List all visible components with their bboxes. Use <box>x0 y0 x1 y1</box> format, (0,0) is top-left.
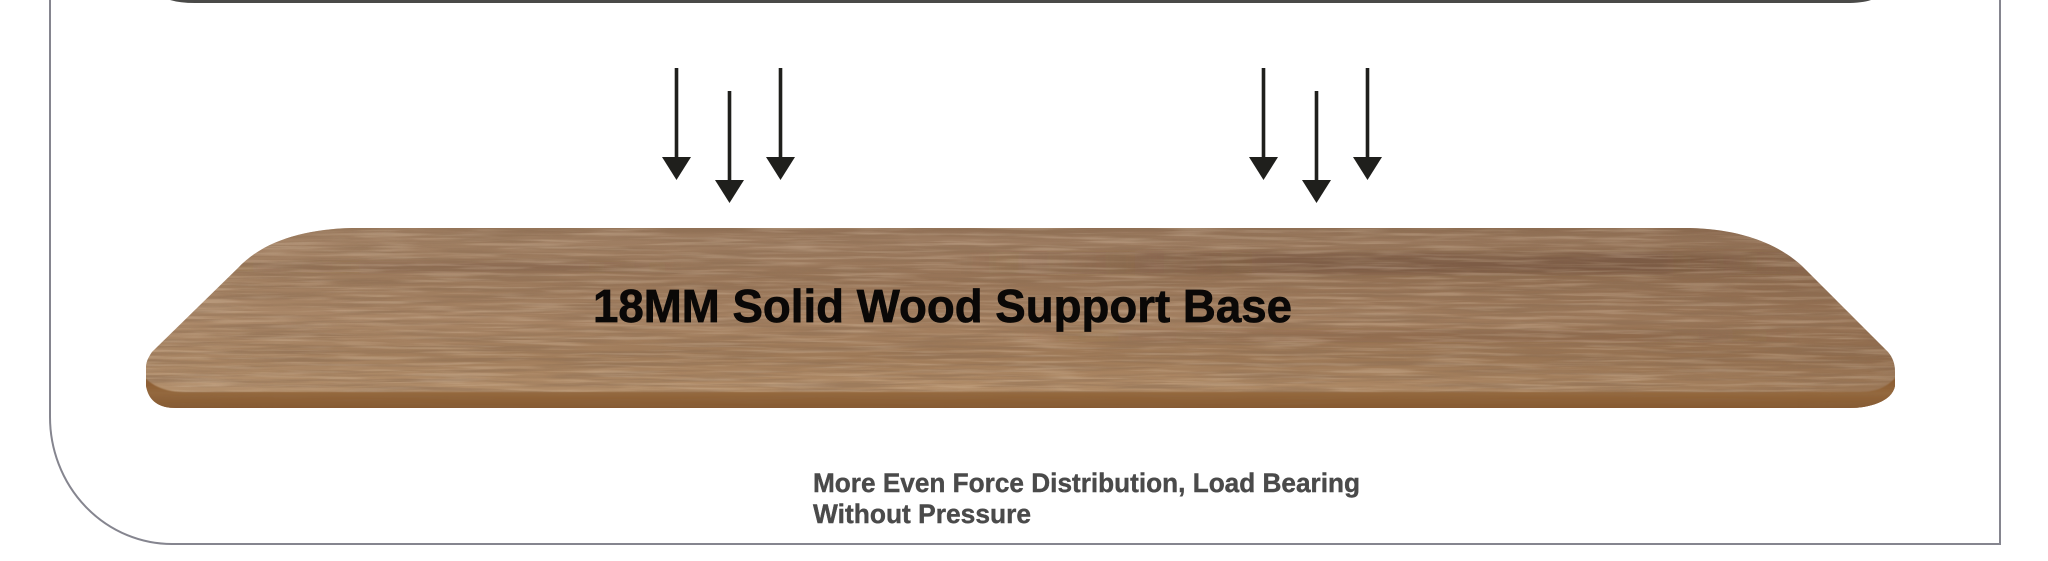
arrow <box>1353 68 1382 180</box>
board front edge <box>146 378 1895 408</box>
arrow <box>715 91 744 203</box>
caption: Without Pressure <box>813 499 1031 529</box>
wood board <box>140 224 1900 414</box>
arrow <box>1249 68 1278 180</box>
arrow <box>1302 91 1331 203</box>
arrows: force group left <box>662 68 795 203</box>
arrows: force group right <box>1249 68 1382 203</box>
caption: More Even Force Distribution, Load Bearing <box>813 468 1360 498</box>
arrow <box>766 68 795 180</box>
board label: 18MM Solid Wood Support Base <box>593 280 1292 332</box>
top bar edge <box>170 0 1871 3</box>
caption <box>813 468 1360 529</box>
arrow <box>662 68 691 180</box>
